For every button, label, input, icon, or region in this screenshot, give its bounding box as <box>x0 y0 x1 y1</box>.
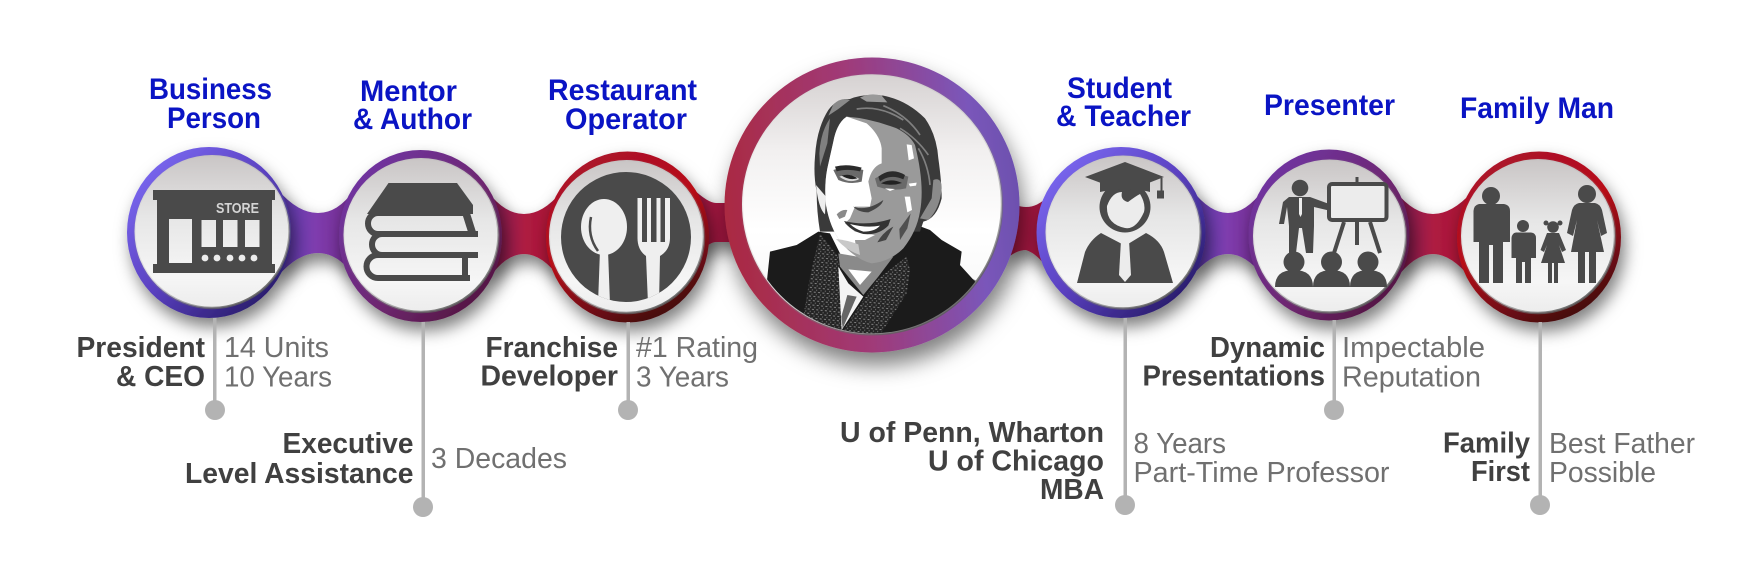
icon: spoon and fork on plate <box>561 172 691 304</box>
callout: Family First <box>1443 322 1695 515</box>
stem and dot <box>1324 320 1344 420</box>
heading: Presenter: Presenter <box>1264 89 1395 122</box>
role text <box>480 332 618 392</box>
callout: U of Penn, Wharton, U of Chicago, MBA <box>840 318 1390 515</box>
disc: portrait <box>742 74 1002 334</box>
detail text: Possible <box>1549 457 1656 489</box>
heading: Student & Teacher: Student <box>1067 72 1172 105</box>
icon: store <box>153 190 275 273</box>
rim: business person <box>127 147 291 318</box>
icon: store: STORE <box>216 201 259 217</box>
role text: First <box>1471 456 1530 488</box>
node: restaurant operator <box>546 152 709 322</box>
disc: mentor and author <box>344 158 498 312</box>
heading: Family Man: Family Man <box>1460 92 1614 125</box>
node: mentor and author <box>339 150 502 322</box>
role text <box>76 332 205 393</box>
heading: Business Person <box>149 73 272 135</box>
role text <box>840 417 1104 506</box>
detail text <box>636 332 758 394</box>
role text: President <box>76 332 205 364</box>
node: central portrait <box>724 58 1020 352</box>
role text: Level Assistance <box>185 458 414 490</box>
role text: Family <box>1443 428 1530 460</box>
callout: Dynamic Presentations <box>1142 320 1485 420</box>
detail text <box>224 332 332 394</box>
rim: student and teacher <box>1036 147 1206 318</box>
connector band between circles <box>278 188 1472 280</box>
heading: Business Person: Person <box>167 102 261 135</box>
stem and dot <box>1530 322 1550 515</box>
detail text <box>1342 332 1485 394</box>
rim: restaurant operator <box>546 152 709 322</box>
stem and dot <box>1115 318 1135 515</box>
detail text: Part-Time Professor <box>1134 457 1390 489</box>
heading: Mentor & Author: Mentor <box>360 75 457 108</box>
stem and dot <box>618 322 638 420</box>
detail text: 3 Years <box>636 362 729 394</box>
detail text <box>1549 428 1695 489</box>
detail text: 8 Years <box>1134 428 1226 460</box>
stem and dot <box>413 322 433 517</box>
rim: portrait <box>724 58 1020 352</box>
heading: Business Person: Business <box>149 73 272 106</box>
role text: U of Chicago <box>928 446 1104 478</box>
disc: business person <box>134 155 290 308</box>
icon: graduate <box>1077 162 1173 283</box>
detail text <box>1134 428 1390 489</box>
node: student and teacher <box>1036 147 1206 318</box>
heading: Student & Teacher: & Teacher <box>1056 100 1191 133</box>
role text: Franchise <box>486 332 618 364</box>
role text <box>185 428 414 490</box>
rim: presenter <box>1248 150 1410 320</box>
detail text: 14 Units <box>224 332 329 364</box>
role text: Dynamic <box>1210 332 1325 364</box>
icon: presenter with audience <box>1275 177 1387 287</box>
rim: mentor and author <box>339 150 502 322</box>
callout: President & CEO <box>76 318 332 420</box>
node: business person <box>127 147 291 318</box>
role text: Executive <box>282 428 414 460</box>
disc: family man <box>1461 159 1615 313</box>
detail text: Impectable <box>1342 332 1485 364</box>
heading: Student & Teacher <box>1056 72 1191 133</box>
heading: Mentor & Author: & Author <box>353 103 472 136</box>
role text: & CEO <box>116 361 205 393</box>
detail text: #1 Rating <box>636 332 758 364</box>
role text <box>1443 428 1530 488</box>
icon: stack of books <box>366 183 478 278</box>
disc: presenter <box>1253 160 1406 312</box>
heading: Restaurant Operator: Restaurant <box>548 74 697 107</box>
disc: student and teacher <box>1046 156 1200 308</box>
stem and dot <box>205 318 225 420</box>
rim: family man <box>1457 152 1621 322</box>
heading: Restaurant Operator: Operator <box>565 103 687 136</box>
detail text: 10 Years <box>224 362 332 394</box>
detail text: 3 Decades <box>431 443 567 475</box>
detail text: Reputation <box>1342 362 1481 394</box>
node: presenter <box>1248 150 1410 320</box>
role text: Presentations <box>1142 360 1325 392</box>
portrait illustration <box>767 94 978 340</box>
icon: family of four <box>1474 185 1607 283</box>
role text: MBA <box>1040 474 1104 506</box>
role text: Developer <box>480 360 618 392</box>
detail text: Best Father <box>1549 428 1695 460</box>
disc: restaurant operator <box>549 160 704 313</box>
heading: Mentor & Author <box>353 75 472 136</box>
role text: U of Penn, Wharton <box>840 417 1104 449</box>
callout: Franchise Developer <box>480 322 758 420</box>
heading: Restaurant Operator <box>548 74 697 136</box>
node: family man <box>1457 152 1621 322</box>
callout: Executive Level Assistance <box>185 322 567 517</box>
role text <box>1142 332 1325 392</box>
